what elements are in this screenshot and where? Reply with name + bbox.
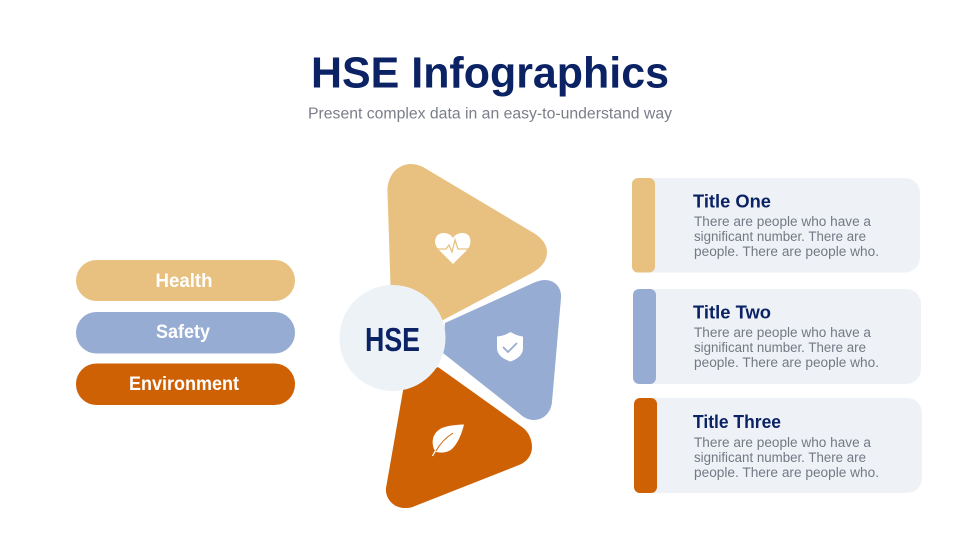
title: HSE Infographics — [311, 48, 669, 98]
card: Title Three — [634, 398, 922, 493]
petal: environment — [386, 367, 532, 508]
pill: Health — [76, 260, 295, 301]
center circle: HSE — [365, 321, 420, 358]
pill: Safety — [76, 312, 295, 354]
pill: Environment — [76, 364, 295, 405]
card: Title Two: There are people who have a — [694, 325, 871, 340]
card: Title Three: significant number. There are — [694, 450, 866, 465]
pill: Environment: Environment — [129, 374, 240, 395]
card: Title Two: people. There are people who. — [694, 355, 879, 370]
subtitle: Present complex data in an easy-to-understand way — [308, 106, 672, 122]
card: Title One: significant number. There are — [694, 229, 866, 244]
card: Title One — [632, 178, 920, 272]
card: Title Three: people. There are people who. — [694, 465, 879, 480]
center circle — [340, 285, 446, 391]
icon: leaf — [432, 424, 464, 456]
icon: shield with check — [497, 332, 523, 362]
card: Title Two: significant number. There are — [694, 340, 866, 355]
card: Title One: people. There are people who. — [694, 244, 879, 259]
pill: Health: Health — [156, 271, 212, 292]
icon: heart with pulse — [435, 233, 470, 264]
card: Title Three: Title Three — [693, 411, 781, 432]
card: Title One: Title One — [693, 190, 771, 212]
petal: safety — [443, 280, 561, 420]
pill: Safety: Safety — [156, 322, 210, 343]
card: Title Two: Title Two — [693, 302, 771, 322]
card: Title One: There are people who have a — [694, 214, 871, 229]
card: Title Three: There are people who have a — [694, 435, 871, 450]
petal: health — [387, 164, 547, 330]
card: Title Two — [633, 289, 921, 384]
